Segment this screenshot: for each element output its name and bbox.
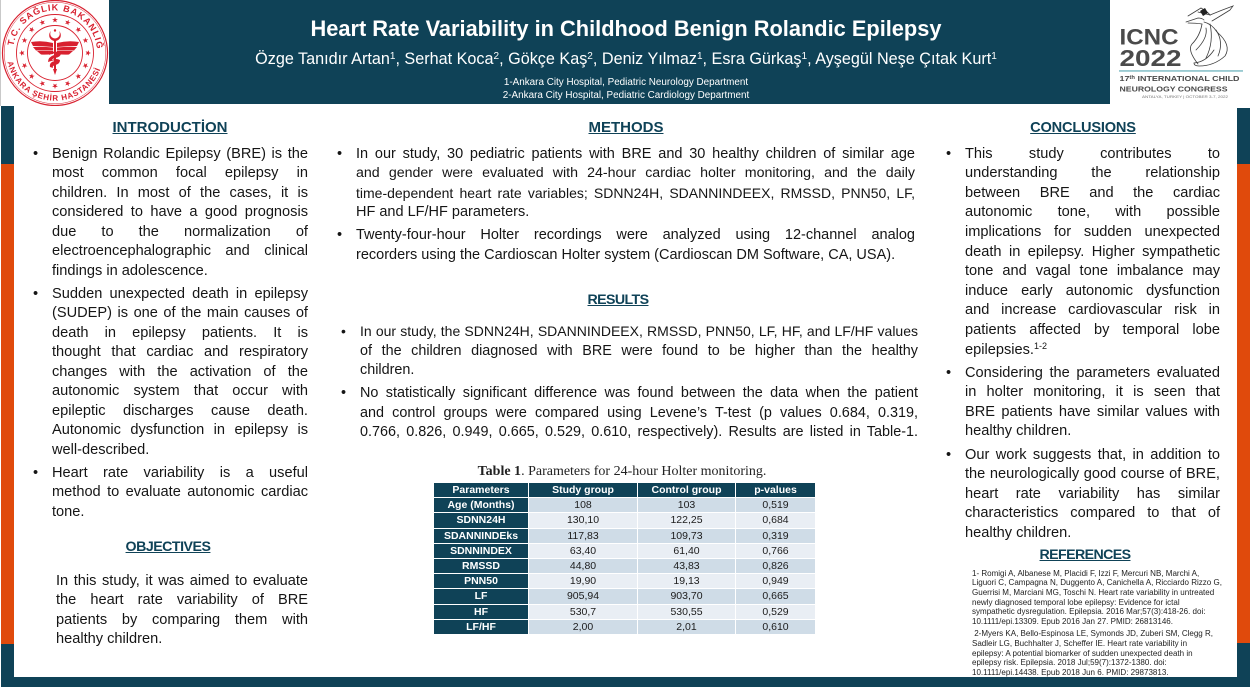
table: Holter parameters: 0,610 (762, 621, 789, 633)
table: Holter parameters: 19,90 (570, 575, 596, 587)
authors: Özge Tanıdır Artan1, Serhat Koca2, Gökçe Kaş2, Deniz Yılmaz1, Esra Gürkaş1, Ayşegül Neşe Çıtak Kurt1 (255, 50, 997, 68)
text block: introduction: Sudden unexpected death in epilepsy (52, 286, 308, 302)
text block: conclusions: heart rate variability has similar (965, 486, 1220, 502)
text block: conclusions: death in epilepsy. Higher sympathetic (965, 244, 1220, 260)
heading: introduction: INTRODUCTİON (112, 119, 228, 136)
header banner (109, 0, 1110, 104)
text: • (946, 146, 951, 162)
table: Holter parameters: 903,70 (670, 590, 703, 602)
text block: references: Liguori C, Campagna N, Duggento A, Canichella A, Ricciardo Rizzo G, (972, 578, 1222, 587)
text block: references: epilepsy: A potential biomarker of sudden unexpected death in (972, 649, 1193, 658)
text block: references: sympathetic dysregulation. Epilepsia. 2016 Mar;57(3):418-26. doi: (972, 607, 1205, 616)
text block: conclusions: tone and vagal tone imbalance may (965, 263, 1220, 279)
congress place and date: ANTALYA, TURKEY | OCTOBER 3-7, 2022 (1142, 95, 1228, 99)
text block: results: of the children diagnosed with BRE were found to be higher than the healthy (360, 343, 918, 359)
text block: conclusions: healthy children. (965, 423, 1071, 439)
text block: conclusions: understanding the relationship (965, 165, 1220, 181)
text: • (33, 286, 38, 302)
2022 wordmark: 2022 (1120, 45, 1182, 71)
heading: results: RESULTS (588, 292, 648, 308)
text block: conclusions: This study contributes to (965, 146, 1220, 162)
text block: conclusions: the neurologically good course of BRE, (965, 466, 1220, 482)
text block: conclusions: Our work suggests that, in addition to (965, 446, 1220, 462)
text block: conclusions: and increase cardiovascular risk in (965, 302, 1220, 318)
text block: references: Sadleir LG, Buchhalter J, Scheffer IE. Heart rate variability in (972, 639, 1187, 648)
text block: conclusions: characteristics compared to that of (965, 505, 1220, 521)
text block: objectives: healthy children. (56, 631, 162, 647)
table: Holter parameters: RMSSD (462, 560, 500, 572)
table: Holter parameters: LF/HF (466, 621, 496, 633)
text block: conclusions: healthy children. (965, 525, 1071, 541)
text block: introduction: epileptic discharges cause death. (52, 403, 308, 419)
text block: objectives: In this study, it was aimed to evaluate (56, 573, 308, 589)
table: Holter parameters: Study group (552, 484, 614, 496)
text block: references: newly diagnosed temporal lobe epilepsy: Evidence for ictal (972, 598, 1180, 607)
right side band (1237, 108, 1250, 687)
text block: methods: time-dependent heart rate variables; SDNN24H, SDANNINDEEX, RMSSD, PNN50, LF, (356, 185, 915, 201)
text block: introduction: thought that cardiac and respiratory (52, 344, 308, 360)
table: Holter parameters: 108 (574, 499, 592, 511)
congress name: 17 (1120, 74, 1128, 83)
text block: methods: Twenty-four-hour Holter recordings were analyzed using 12-channel analog (356, 227, 915, 243)
text block: introduction: Heart rate variability is a useful (52, 465, 308, 481)
text block: methods (337, 146, 915, 263)
table: Holter parameters: 117,83 (567, 530, 599, 542)
table: Holter parameters: 0,826 (762, 560, 789, 572)
ICNC wordmark: ICNC (1120, 24, 1178, 50)
text block: references: 10.1111/epi.13309. Epub 2016 Jan 27. PMID: 26813146. (972, 617, 1173, 626)
table: Holter parameters: 2,00 (573, 621, 593, 633)
text block: methods: In our study, 30 pediatric patients with BRE and 30 healthy children of similar age (356, 146, 915, 162)
text: • (337, 146, 342, 162)
text block: references: 1- Romigi A, Albanese M, Placidi F, Izzi F, Mercuri NB, Marchi A, (972, 568, 1199, 578)
text block: introduction: death in epilepsy patients. It is (52, 325, 308, 341)
table: Holter parameters: 19,13 (673, 575, 700, 587)
table: Holter parameters: Control group (652, 484, 721, 496)
text block: results: 0.766, 0.826, 0.949, 0.665, 0.529, 0.610, respectively). Results are listed in Table-1. (360, 424, 918, 440)
text block: introduction: most common focal epilepsy in (52, 165, 308, 181)
text block: methods: and gender were evaluated with 24-hour cardiac holter monitoring, and the daily (356, 165, 915, 181)
table: Holter parameters: 0,949 (762, 575, 789, 587)
left side band (1, 106, 14, 687)
text block: references: 10.1111/epi.14438. Epub 2018 Jun 6. PMID: 29873813. (972, 668, 1169, 677)
text: • (33, 146, 38, 162)
table: Holter parameters: 44,80 (570, 560, 596, 572)
table: Holter parameters: 43,83 (673, 560, 700, 572)
text block: introduction: findings in adolescence. (52, 263, 208, 279)
text block: methods: HF and LF/HF parameters. (356, 204, 529, 220)
text block: conclusions: in holter monitoring, it is seen that (965, 384, 1220, 400)
text block: results (341, 323, 918, 440)
text block: conclusions: patients affected by temporal lobe (965, 322, 1220, 338)
text block: results: and control groups were compared using Levene’s T-test (p values 0.684, 0.319, (360, 405, 918, 421)
text block: objectives: the heart rate variability of BRE (56, 592, 308, 608)
table: Holter parameters: 0,319 (762, 530, 789, 542)
text block: introduction: considered to have a good prognosis (52, 204, 308, 220)
text block: introduction: due to the normalization of (52, 224, 308, 240)
heading: objectives: OBJECTIVES (126, 539, 210, 555)
table: Holter parameters: 63,40 (570, 545, 596, 557)
text: • (946, 365, 951, 381)
text block: conclusions: epilepsies.1-2 (965, 341, 1047, 358)
text block: objectives (56, 573, 308, 647)
text block: results: No statistically significant difference was found between the data when the patient (360, 385, 918, 401)
text: • (341, 385, 346, 401)
text: • (337, 227, 342, 243)
text: • (946, 446, 951, 462)
text block: results: In our study, the SDNN24H, SDANNINDEEX, RMSSD, PNN50, LF, HF, and LF/HF values (360, 323, 918, 339)
table: Holter parameters: 0,684 (762, 514, 789, 526)
text block: conclusions: autonomic tone, with possible (965, 204, 1220, 220)
table: Holter parameters: 130,10 (567, 514, 599, 526)
table: Holter parameters: 905,94 (567, 590, 599, 602)
title: Heart Rate Variability in Childhood Benign Rolandic Epilepsy (310, 16, 942, 41)
table: Holter parameters: LF (475, 590, 487, 602)
table: Holter parameters: 2,01 (676, 621, 697, 633)
heading: conclusions: CONCLUSIONS (1030, 120, 1136, 136)
text block: introduction: Benign Rolandic Epilepsy (BRE) is the (52, 146, 308, 162)
table: Holter parameters: 0,529 (762, 606, 789, 618)
text block: conclusions: between BRE and the cardiac (965, 185, 1220, 201)
logo: Ankara Sehir Hastanesi seal: ANKARA ŞEHİR HASTANESİ (8, 62, 100, 101)
text block: introduction: tone. (52, 504, 84, 520)
congress name: INTERNATIONAL CHILD (1135, 74, 1240, 83)
text block: introduction: autonomic system that occur with (52, 383, 308, 399)
text block: references: epilepsy risk. Epilepsia. 2018 Jul;59(7):1372-1380. doi: (972, 658, 1167, 667)
table: Holter parameters: 0,519 (762, 499, 789, 511)
table: Holter parameters: SDNNINDEX (450, 545, 512, 557)
text block: introduction: well-described. (52, 442, 149, 458)
logo: ICNC 2022 congress (1119, 5, 1243, 99)
table: Holter parameters: 109,73 (670, 530, 703, 542)
text: • (33, 465, 38, 481)
text block: introduction: electroencephalographic and clinical (52, 243, 308, 259)
icon: whirling dervish (1186, 6, 1233, 66)
table: Holter parameters (434, 483, 815, 634)
affiliations: 2-Ankara City Hospital, Pediatric Cardiology Department (503, 90, 749, 101)
table: Holter parameters: Parameters (452, 484, 510, 496)
logo: Ankara Sehir Hastanesi seal (0, 0, 108, 106)
text block: introduction (33, 146, 308, 520)
text block: results: children. (360, 362, 414, 378)
table: Holter parameters: Age (Months) (447, 499, 515, 511)
text block: conclusions: induce early autonomic dysfunction (965, 283, 1220, 299)
table: Holter parameters: 103 (678, 499, 695, 511)
table caption: Table 1. Parameters for 24-hour Holter monitoring. (478, 464, 766, 479)
table: Holter parameters: PNN50 (464, 575, 498, 587)
table: Holter parameters: 530,55 (670, 606, 703, 618)
text block: conclusions (946, 146, 1220, 541)
table: Holter parameters: 0,766 (762, 545, 789, 557)
text block: conclusions: BRE patients have similar values with (965, 404, 1220, 420)
text block: references (972, 568, 1222, 677)
table: Holter parameters: 61,40 (673, 545, 700, 557)
text block: methods: recorders using the Cardioscan Holter system (Cardioscan DM Software, CA, USA). (356, 247, 895, 263)
text block: references: 2-Myers KA, Bello-Espinosa LE, Symonds JD, Zuberi SM, Clegg R, (974, 629, 1213, 638)
table: Holter parameters: 0,665 (762, 590, 789, 602)
text block: introduction: Autonomic dysfunction in epilepsy is (52, 422, 308, 438)
table: Holter parameters: SDNN24H (456, 514, 506, 526)
logo: ICNC 2022 congress: NEUROLOGY CONGRESS (1120, 84, 1228, 94)
table: Holter parameters: HF (474, 606, 488, 618)
text block: conclusions: implications for sudden unexpected (965, 224, 1220, 240)
text block: introduction: changes with the activation of the (52, 364, 308, 380)
table: Holter parameters: p-values (754, 484, 797, 496)
table: Holter parameters: 530,7 (570, 606, 596, 618)
text block: conclusions: Considering the parameters evaluated (965, 365, 1220, 381)
congress name: th (1129, 75, 1135, 81)
text block: references: Guerrisi M, Marciani MG, Toschi N. Heart rate variability in untreated (972, 588, 1214, 597)
bottom band (1, 677, 1250, 687)
text block: introduction: children. In most of the cases, it is (52, 185, 308, 201)
table: Holter parameters: 122,25 (670, 514, 703, 526)
text block: introduction: method to evaluate autonomic cardiac (52, 484, 308, 500)
table: Holter parameters: SDANNINDEks (444, 530, 518, 542)
text block: introduction: (SUDEP) is one of the main causes of (52, 305, 308, 321)
heading: references: REFERENCES (1040, 547, 1130, 563)
text: • (341, 323, 346, 339)
affiliations (503, 77, 750, 101)
heading: methods: METHODS (588, 119, 664, 136)
text block: objectives: patients by comparing them with (56, 612, 308, 628)
affiliations: 1-Ankara City Hospital, Pediatric Neurology Department (504, 77, 748, 88)
